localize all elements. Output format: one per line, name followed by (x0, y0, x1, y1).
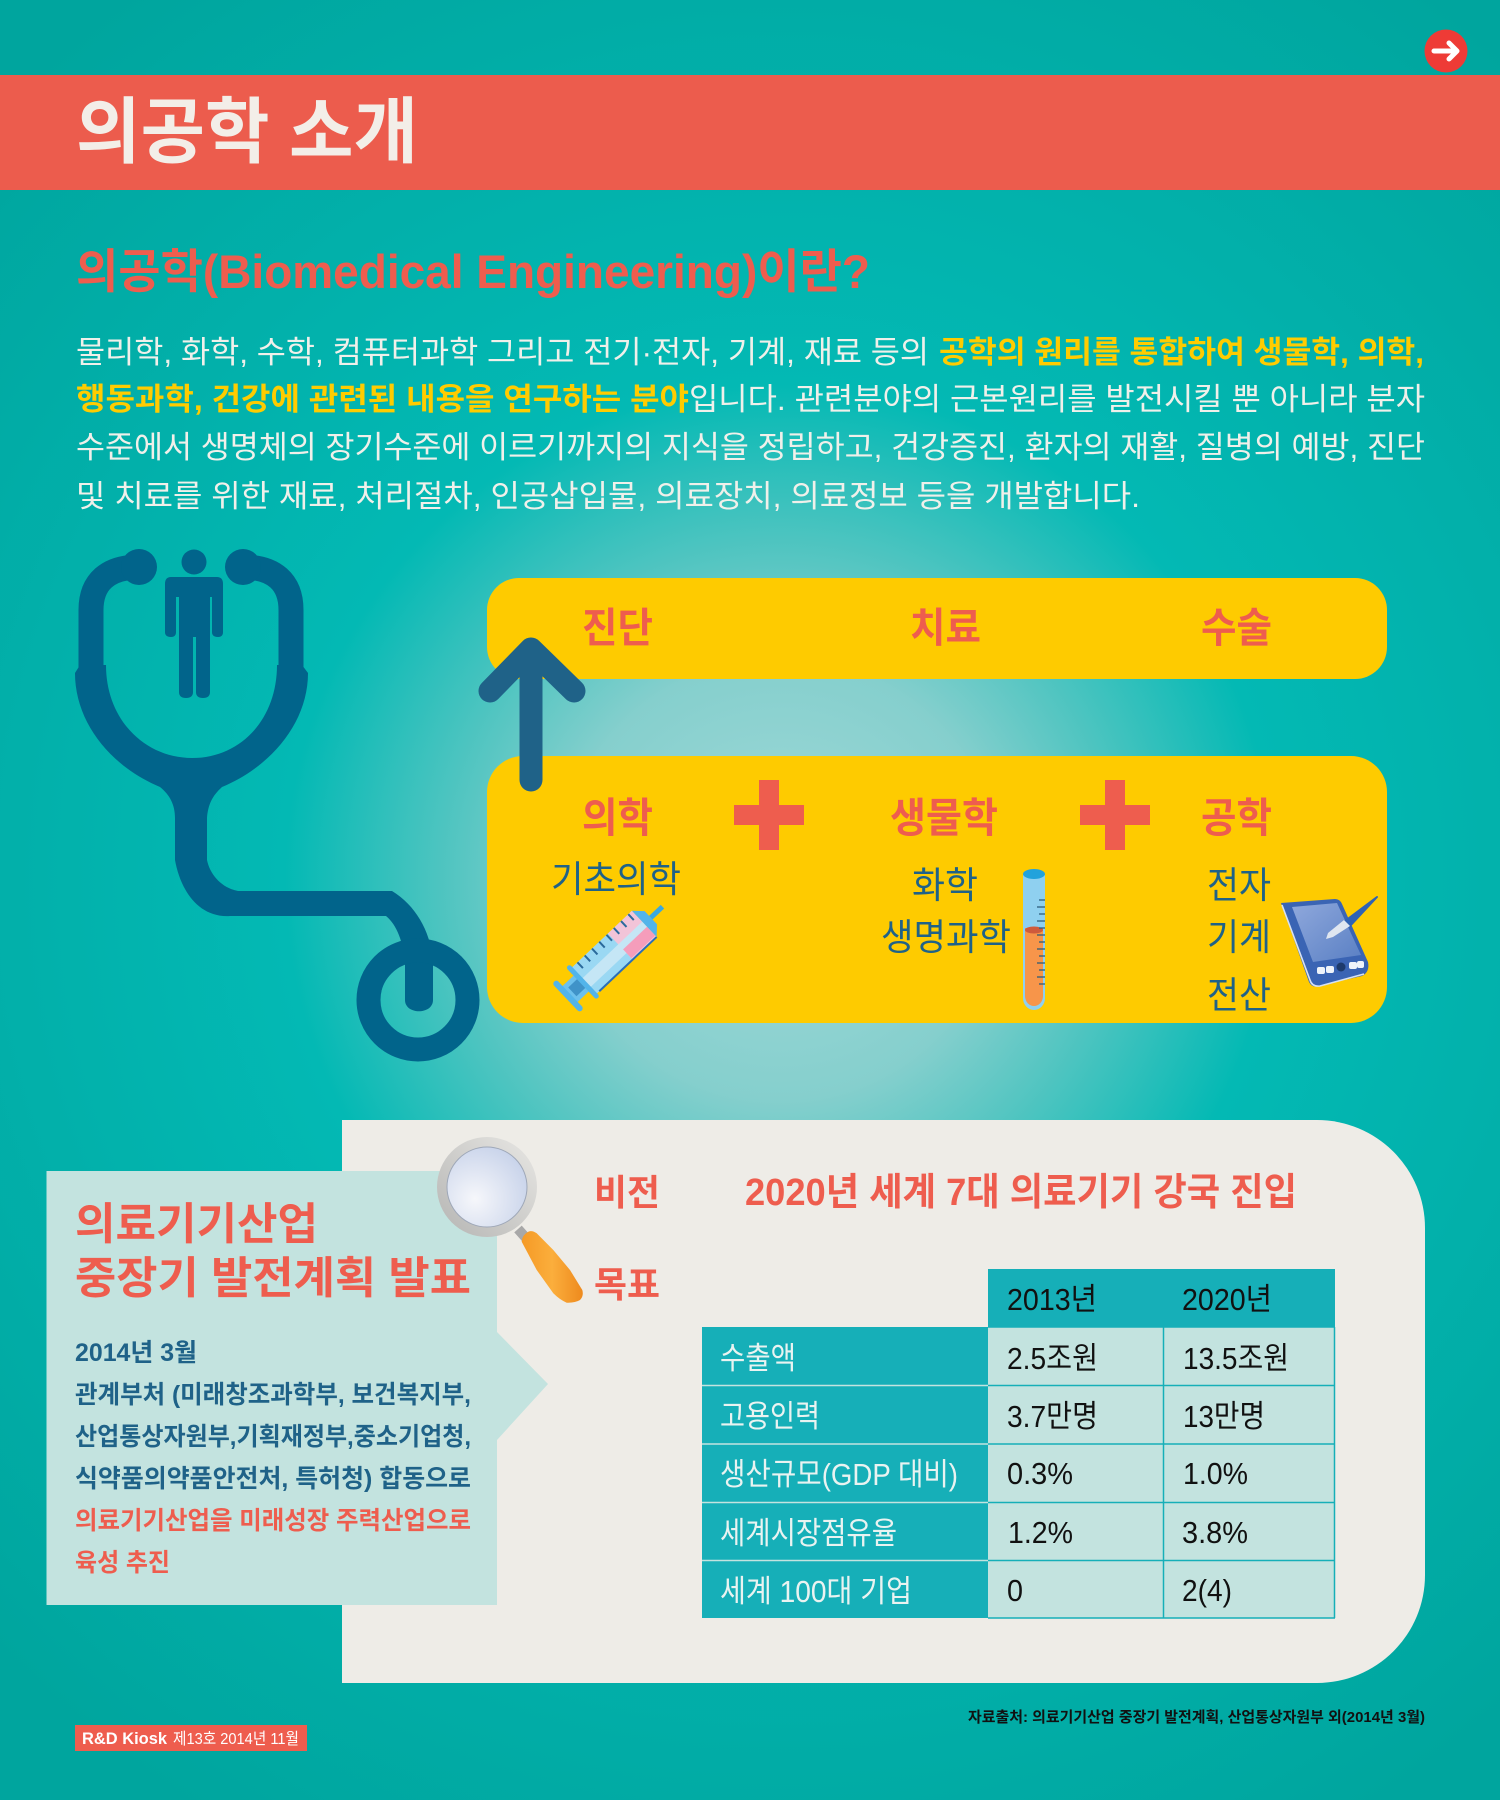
callout body (75, 1339, 471, 1577)
outcome labels: 진단 (582, 605, 653, 651)
intro paragraph: 행동과학, 건강에 관련된 내용을 연구하는 분야 (76, 382, 689, 417)
table values: 2.5조원 (1007, 1341, 1098, 1376)
row labels (720, 1341, 958, 1609)
goals label: 목표 (594, 1264, 660, 1305)
sub-discipline text: 기계 (1207, 917, 1271, 958)
icon: plus 2 (1080, 780, 1150, 850)
section heading: 의공학(Biomedical Engineering)이란? (76, 245, 870, 298)
table values: 0.3% (1007, 1456, 1073, 1491)
discipline labels: 생물학 (890, 795, 998, 841)
row labels: 세계시장점유율 (720, 1516, 897, 1551)
discipline labels (582, 795, 1272, 841)
vision label: 비전 (594, 1172, 660, 1213)
panel: industry plan callout (46, 1171, 548, 1605)
table values: 0 (1007, 1573, 1023, 1608)
panel: vision and goals (342, 1120, 1425, 1683)
icon: person (165, 550, 223, 698)
publication badge (75, 1725, 307, 1751)
intro paragraph (76, 335, 1425, 514)
icon: next arrow button (1424, 30, 1468, 72)
outcome labels: 치료 (910, 605, 981, 651)
table values: 1.2% (1008, 1515, 1073, 1550)
callout body: 산업통상자원부,기획재정부,중소기업청, (75, 1423, 471, 1451)
publication badge: R&D Kiosk (82, 1729, 168, 1748)
table values (1007, 1341, 1289, 1608)
discipline labels: 의학 (582, 795, 653, 841)
sub-discipline text: 전자 (1207, 865, 1271, 906)
table header (1007, 1282, 1272, 1317)
table values: 13.5조원 (1183, 1341, 1289, 1376)
intro paragraph: 공학의 원리를 통합하여 생물학, 의학, (939, 335, 1424, 370)
table: goals (702, 1269, 1335, 1618)
callout body: 식약품의약품안전처, 특허청) 합동으로 (75, 1465, 471, 1493)
table values: 13만명 (1183, 1399, 1265, 1434)
outcome labels (582, 605, 1272, 651)
icon: up arrow (490, 649, 574, 780)
callout body: 2014년 3월 (75, 1339, 197, 1367)
icon: syringe (551, 891, 678, 1014)
icon: test tube (1023, 869, 1045, 1010)
callout body: 의료기기산업을 미래성장 주력산업으로 (75, 1507, 471, 1535)
callout body: 관계부처 (미래창조과학부, 보건복지부, (75, 1381, 471, 1409)
outcome labels: 수술 (1201, 605, 1272, 651)
icon: magnifying glass (437, 1137, 583, 1303)
callout heading (75, 1200, 471, 1303)
sub-discipline text: 생명과학 (881, 917, 1011, 958)
panel: disciplines (487, 756, 1387, 1023)
intro paragraph: 및 치료를 위한 재료, 처리절차, 인공삽입물, 의료장치, 의료정보 등을 개발합니다. (76, 479, 1140, 514)
intro paragraph: 수준에서 생명체의 장기수준에 이르기까지의 지식을 정립하고, 건강증진, 환자의 재활, 질병의 예방, 진단 (76, 430, 1425, 465)
row labels: 수출액 (720, 1341, 796, 1376)
row labels: 세계 100대 기업 (720, 1574, 912, 1609)
discipline labels: 공학 (1201, 795, 1272, 841)
intro paragraph: 입니다. 관련분야의 근본원리를 발전시킬 뿐 아니라 분자 (689, 382, 1425, 417)
vision statement: 2020년 세계 7대 의료기기 강국 진입 (745, 1172, 1297, 1214)
icon: stethoscope with person (75, 549, 468, 1050)
title: 의공학 소개 (76, 93, 418, 173)
intro paragraph: 물리학, 화학, 수학, 컴퓨터과학 그리고 전기·전자, 기계, 재료 등의 (76, 335, 929, 370)
table values: 2(4) (1182, 1573, 1232, 1608)
sub-discipline text (551, 859, 1271, 1016)
table values: 1.0% (1183, 1456, 1248, 1491)
table header: 2013년 (1007, 1282, 1097, 1317)
icon: plus 1 (734, 780, 804, 850)
callout heading: 의료기기산업 (75, 1200, 318, 1249)
callout body: 육성 추진 (75, 1549, 170, 1577)
sub-discipline text: 화학 (912, 865, 978, 906)
table values: 3.8% (1182, 1515, 1248, 1550)
panel: outcomes (487, 578, 1387, 679)
icon: tablet and stylus (1281, 897, 1377, 986)
row labels: 생산규모(GDP 대비) (720, 1457, 958, 1492)
row labels: 고용인력 (720, 1399, 820, 1434)
table values: 3.7만명 (1007, 1399, 1098, 1434)
publication badge: 제13호 2014년 11월 (173, 1730, 299, 1748)
callout heading: 중장기 발전계획 발표 (75, 1254, 471, 1303)
table header: 2020년 (1182, 1282, 1272, 1317)
sub-discipline text: 전산 (1207, 975, 1271, 1016)
source note: 자료출처: 의료기기산업 중장기 발전계획, 산업통상자원부 외(2014년 3월) (968, 1709, 1425, 1726)
sub-discipline text: 기초의학 (551, 859, 681, 900)
title banner (0, 75, 1500, 190)
